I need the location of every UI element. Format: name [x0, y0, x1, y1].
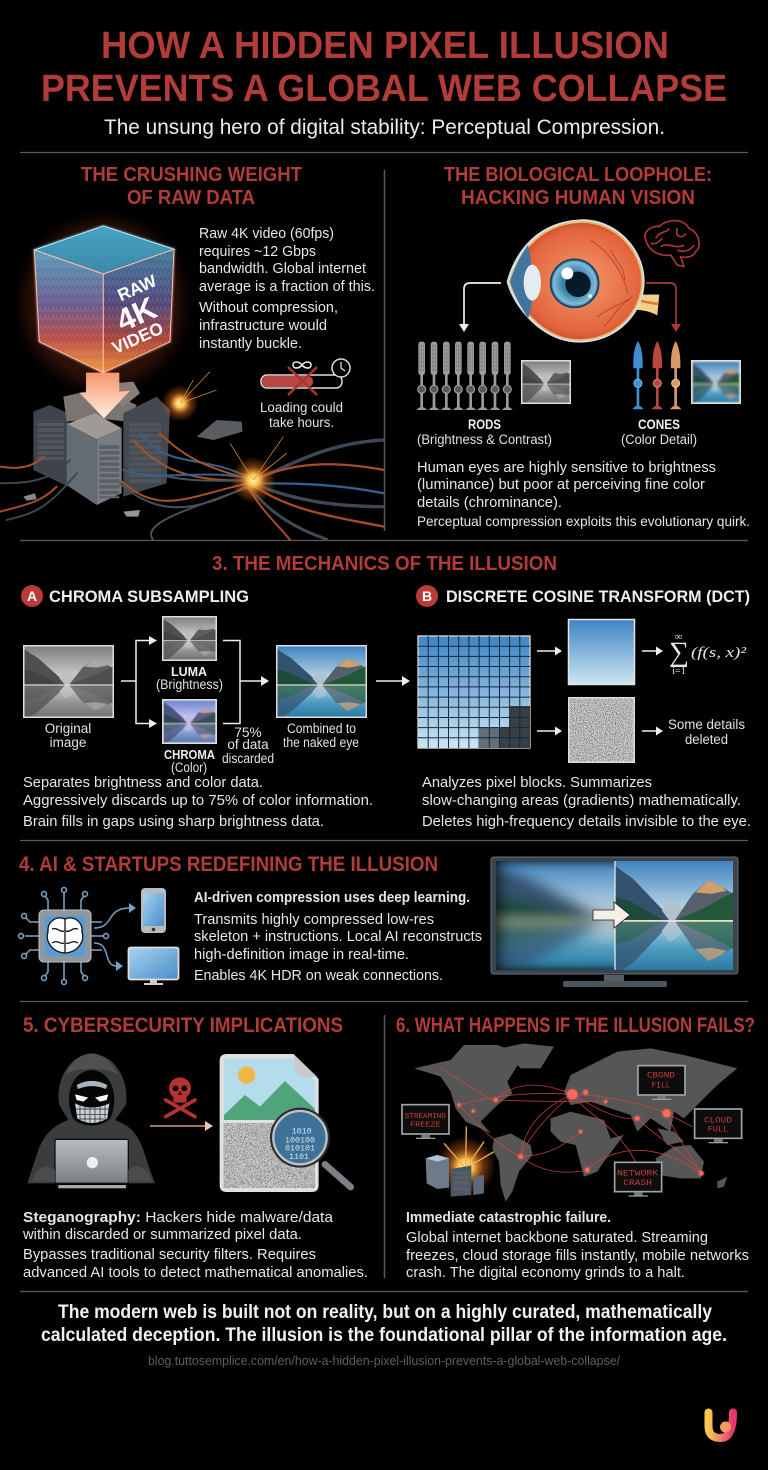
label: 75% of data discarded: of data [227, 737, 269, 752]
formula: summation: ∞ [675, 631, 683, 643]
text: human eye sensitivity: (luminance) but poor at perceiving fine color [417, 476, 705, 493]
arrow: grid to gradient [537, 646, 562, 656]
text: raw 4K bandwidth: average is a fraction of this. [199, 278, 375, 295]
label: chroma color: CHROMA [164, 748, 215, 762]
icon: magnifier over binary: 010101 [285, 1144, 315, 1154]
label: luma brightness [156, 665, 223, 692]
caption: loading could take hours: Loading could [260, 400, 343, 415]
icon: monitor [128, 948, 178, 985]
heading: AI and startups: 4. AI & STARTUPS REDEFINING THE ILLUSION [19, 853, 438, 876]
text: AI compression: Transmits highly compressed low-res [194, 911, 434, 928]
label: cones: CONES [638, 417, 680, 432]
callout: CBGND fill: CBGND [647, 1072, 675, 1081]
text: raw 4K bandwidth: infrastructure would [199, 317, 327, 334]
arrow: chip to phone [94, 903, 136, 928]
text: DCT explanation: slow-changing areas (gradients) mathematically. [422, 792, 741, 809]
text: raw 4K bandwidth: Raw 4K video (60fps) [199, 225, 334, 242]
illustration: eye cross-section [507, 219, 659, 343]
label: combined to the naked eye [283, 721, 359, 750]
illustration: glowing raw 4K video cube with arrow: 4K [111, 290, 162, 339]
callout: streaming freeze [402, 1105, 449, 1139]
text: catastrophic failure: crash. The digital economy grinds to a halt. [406, 1264, 685, 1281]
text: AI compression: Enables 4K HDR on weak connections. [194, 967, 443, 984]
label: luma brightness: (Brightness) [156, 677, 223, 692]
chart: pixel block grid [418, 636, 530, 748]
text: DCT explanation: Analyzes pixel blocks. Summarizes [422, 774, 652, 791]
callout: network crash: CRASH [623, 1178, 652, 1188]
label: chroma color: (Color) [171, 760, 207, 775]
label: some details deleted: Some details [668, 717, 745, 732]
label: original image [45, 721, 91, 750]
formula: summation: (f(s, x)² [691, 645, 747, 661]
icon: magnifier over binary [270, 1108, 351, 1187]
label: cones: (Color Detail) [621, 432, 697, 447]
main title: HOW A HIDDEN PIXEL ILLUSION [101, 25, 669, 67]
icon: crossed-out loading bar with clock [261, 359, 350, 395]
image: greyscale lake [521, 360, 571, 405]
text: chroma explanation: Separates brightness and color data. [23, 774, 263, 791]
image: blurry color lake [691, 360, 741, 405]
text: human eye sensitivity [417, 459, 750, 529]
arrow: eye to cones [646, 283, 681, 332]
arrow: noise to deleted [642, 726, 663, 736]
label: chroma color [164, 748, 215, 775]
arrow: merge to combined [223, 640, 269, 724]
arrow: eye to rods [459, 283, 501, 332]
text: steganography: Bypasses traditional security filters. Requires [23, 1246, 316, 1263]
arrow: chroma to DCT [376, 676, 410, 686]
text: steganography: Steganography: Hackers hide malware/data [23, 1209, 334, 1226]
text: raw 4K bandwidth: Without compression, [199, 299, 338, 316]
arrow: chip to monitor [94, 943, 123, 971]
text: AI compression: high-definition image in real-time. [194, 946, 409, 963]
callout: cloud full: CLOUD [704, 1115, 732, 1125]
caption: loading could take hours: take hours. [269, 415, 334, 430]
formula: summation [669, 631, 747, 677]
label: rods: RODS [468, 417, 501, 432]
heading: A chroma subsampling: A [27, 588, 37, 604]
heading: A chroma subsampling: CHROMA SUBSAMPLING [49, 587, 249, 606]
text: DCT explanation [422, 774, 751, 830]
text: raw 4K bandwidth: bandwidth. Global internet [199, 260, 367, 277]
text: raw 4K bandwidth: requires ~12 Gbps [199, 243, 316, 260]
label: some details deleted: deleted [685, 732, 728, 747]
heading: B DCT: DISCRETE COSINE TRANSFORM (DCT) [446, 587, 750, 606]
label: some details deleted [668, 717, 745, 747]
callout: network crash: NETWORK [617, 1169, 658, 1179]
label: rods [417, 417, 552, 447]
callout: network crash [615, 1162, 662, 1197]
label: 75% of data discarded: discarded [222, 751, 274, 766]
label: luma brightness: LUMA [171, 665, 207, 679]
source URL: blog.tuttosemplice.com/en/how-a-hidden-pixel-illusion-prevents-a-global-web-collapse/ [148, 1354, 621, 1368]
panel: cybersecurity implications [22, 1014, 368, 1281]
text: raw 4K bandwidth [199, 225, 375, 352]
heading: biological loophole [444, 164, 712, 209]
caption: loading could take hours [260, 400, 343, 430]
icon: phone [141, 888, 166, 933]
callout: streaming freeze: FREEZE [410, 1122, 441, 1130]
heading: cybersecurity: 5. CYBERSECURITY IMPLICATIONS [23, 1014, 343, 1037]
conclusion text [41, 1301, 727, 1346]
panel: crushing weight of raw data [0, 164, 384, 540]
image: luma channel [162, 616, 217, 662]
callout: CBGND fill [638, 1066, 685, 1100]
icon: magnifier over binary: 100100 [285, 1135, 315, 1145]
callout: cloud full [695, 1109, 742, 1143]
image: smooth gradient block [568, 620, 634, 684]
subtitle: The unsung hero of digital stability: Perceptual Compression. [104, 116, 665, 139]
icon: logo [708, 1412, 733, 1438]
illustration: hooded hacker with laptop [27, 1053, 155, 1188]
text: raw 4K bandwidth: instantly buckle. [199, 335, 302, 352]
callout: CBGND fill: FILL [652, 1082, 671, 1091]
formula: summation: ∑ [669, 637, 689, 668]
label: original image: Original [45, 721, 91, 736]
text: DCT explanation: Deletes high-frequency details invisible to the eye. [422, 813, 751, 830]
label: 75% of data discarded: 75% [234, 725, 262, 740]
label: cones [621, 417, 697, 447]
panel: what happens if the illusion fails [396, 1014, 755, 1281]
text: steganography: advanced AI tools to detect mathematical anomalies. [23, 1264, 368, 1281]
text: catastrophic failure: freezes, cloud storage fills instantly, mobile networks [406, 1247, 749, 1264]
text: chroma explanation [23, 774, 373, 830]
panel: chroma subsampling [21, 585, 373, 830]
label: rods: (Brightness & Contrast) [417, 432, 552, 447]
icon: skull and crossbones [166, 1077, 195, 1117]
icon: magnifier over binary: 1101 [289, 1152, 309, 1162]
heading: crushing weight: OF RAW DATA [127, 187, 255, 209]
chart: world map with red network lines [414, 1043, 737, 1202]
text: chroma explanation: Aggressively discards up to 75% of color information. [23, 792, 373, 809]
illustration: glowing raw 4K video cube with arrow: VIDEO [109, 318, 166, 358]
illustration: glowing raw 4K video cube with arrow: RAW [114, 270, 160, 305]
heading: biological loophole: THE BIOLOGICAL LOOPHOLE: [444, 164, 712, 186]
text: AI compression: skeleton + instructions. Local AI reconstructs [194, 928, 482, 945]
panel: discrete cosine transform [416, 585, 751, 830]
conclusion text: The modern web is built not on reality, but on a highly curated, mathematically [58, 1301, 712, 1323]
text: AI compression: AI-driven compression uses deep learning. [194, 890, 470, 906]
panel: AI and startups [18, 853, 738, 987]
image: original greyscale [23, 645, 114, 720]
label: original image: image [50, 735, 86, 750]
arrow: split to luma and chroma [121, 636, 157, 728]
icon: brain outline [645, 221, 699, 267]
text: human eye sensitivity: Human eyes are highly sensitive to brightness [417, 459, 716, 476]
illustration: rod cells [416, 342, 513, 410]
image: noise block [568, 697, 635, 763]
callout: cloud full: FULL [708, 1125, 728, 1135]
illustration: server stack and cables [0, 372, 384, 540]
icon: magnifier over binary: 1010 [292, 1126, 312, 1136]
illustration: cone cells [632, 341, 681, 409]
text: catastrophic failure: Global internet backbone saturated. Streaming [406, 1229, 708, 1246]
text: catastrophic failure [406, 1209, 749, 1281]
text: AI compression [194, 890, 482, 984]
label: 75% of data discarded [222, 725, 274, 766]
image: combined colour [276, 645, 367, 720]
illustration: TV before and after [491, 857, 738, 987]
text: chroma explanation: Brain fills in gaps using sharp brightness data. [23, 813, 324, 830]
text: steganography [22, 1209, 368, 1281]
heading: B DCT: B [422, 588, 432, 604]
label: combined to the naked eye: Combined to [287, 721, 356, 736]
illustration: image file with hidden data [220, 1054, 319, 1192]
illustration: exploding servers [426, 1127, 496, 1197]
illustration: glowing raw 4K video cube with arrow [23, 220, 183, 418]
main title [41, 25, 727, 110]
formula: summation: i=1 [672, 666, 686, 677]
text: steganography: within discarded or summarized pixel data. [22, 1226, 302, 1243]
main title: PREVENTS A GLOBAL WEB COLLAPSE [41, 68, 727, 110]
heading: mechanics of the illusion: 3. THE MECHANICS OF THE ILLUSION [212, 553, 557, 575]
heading: crushing weight: THE CRUSHING WEIGHT [81, 164, 302, 186]
heading: crushing weight [81, 164, 302, 209]
text: human eye sensitivity: Perceptual compression exploits this evolutionary quirk. [417, 513, 750, 529]
text: catastrophic failure: Immediate catastrophic failure. [406, 1209, 611, 1226]
label: combined to the naked eye: the naked eye [283, 735, 359, 750]
arrow: grid to noise [537, 726, 562, 736]
text: human eye sensitivity: details (chrominance). [417, 494, 562, 511]
arrow: gradient to formula [642, 646, 663, 656]
callout: streaming freeze: STREAMING [405, 1113, 446, 1121]
icon: AI chip brain [18, 888, 108, 984]
arrow: hacker to file [150, 1121, 213, 1131]
heading: biological loophole: HACKING HUMAN VISION [461, 187, 695, 209]
image: chroma channel [162, 699, 217, 745]
panel: biological loophole [416, 164, 750, 529]
